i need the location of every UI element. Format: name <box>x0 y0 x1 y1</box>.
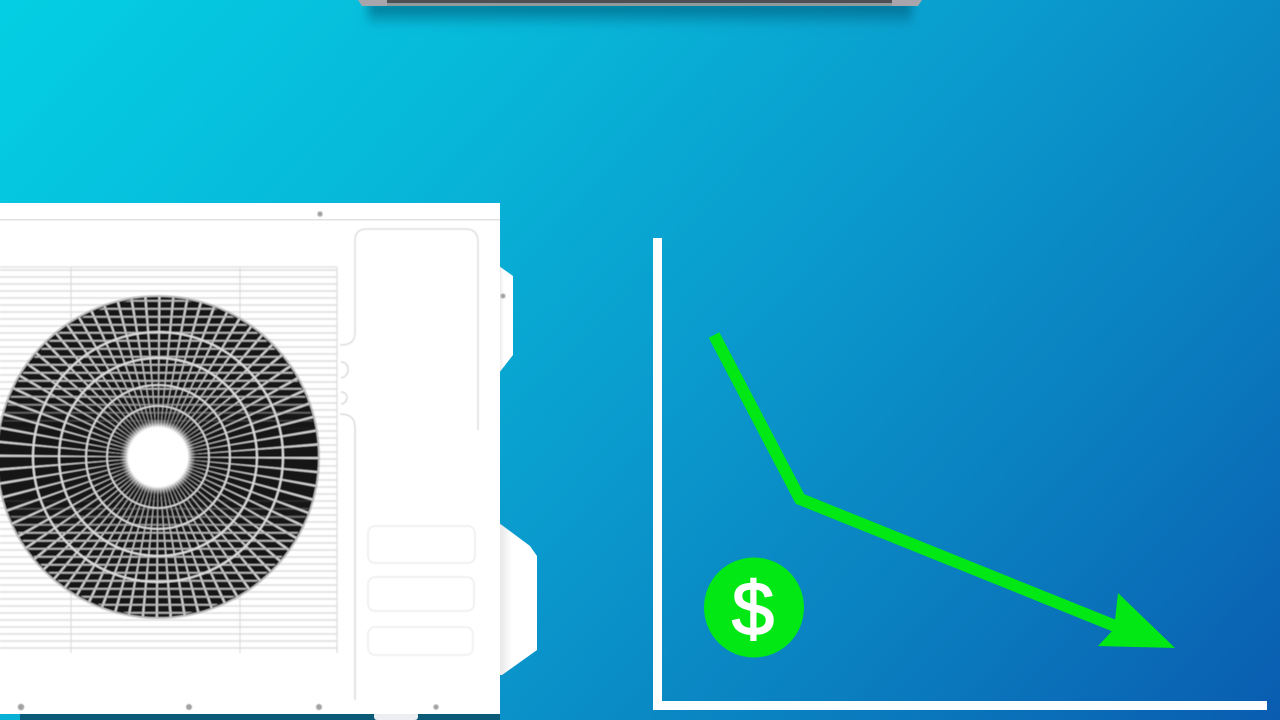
lower side valve cover <box>499 523 537 675</box>
unit foot <box>374 712 418 720</box>
dollar icon: $ <box>732 567 774 652</box>
fan guard <box>0 290 330 625</box>
horizontal grille bars <box>3 299 313 615</box>
side handle <box>499 266 513 373</box>
radial spokes <box>63 362 253 552</box>
concentric rings <box>33 332 283 582</box>
fan hub <box>120 419 196 495</box>
outdoor AC unit <box>0 203 537 720</box>
service panel outlines <box>340 229 478 700</box>
ground shadow under unit <box>20 713 500 720</box>
unit body <box>0 203 500 714</box>
louver grille <box>0 267 337 653</box>
arrowhead <box>1098 593 1175 648</box>
indoor AC unit bottom edge <box>358 0 922 26</box>
screws <box>18 211 505 710</box>
falling green cost line <box>714 335 1175 648</box>
dollar icon <box>704 558 804 658</box>
top seam line <box>0 219 500 220</box>
chart axes <box>658 238 1267 706</box>
